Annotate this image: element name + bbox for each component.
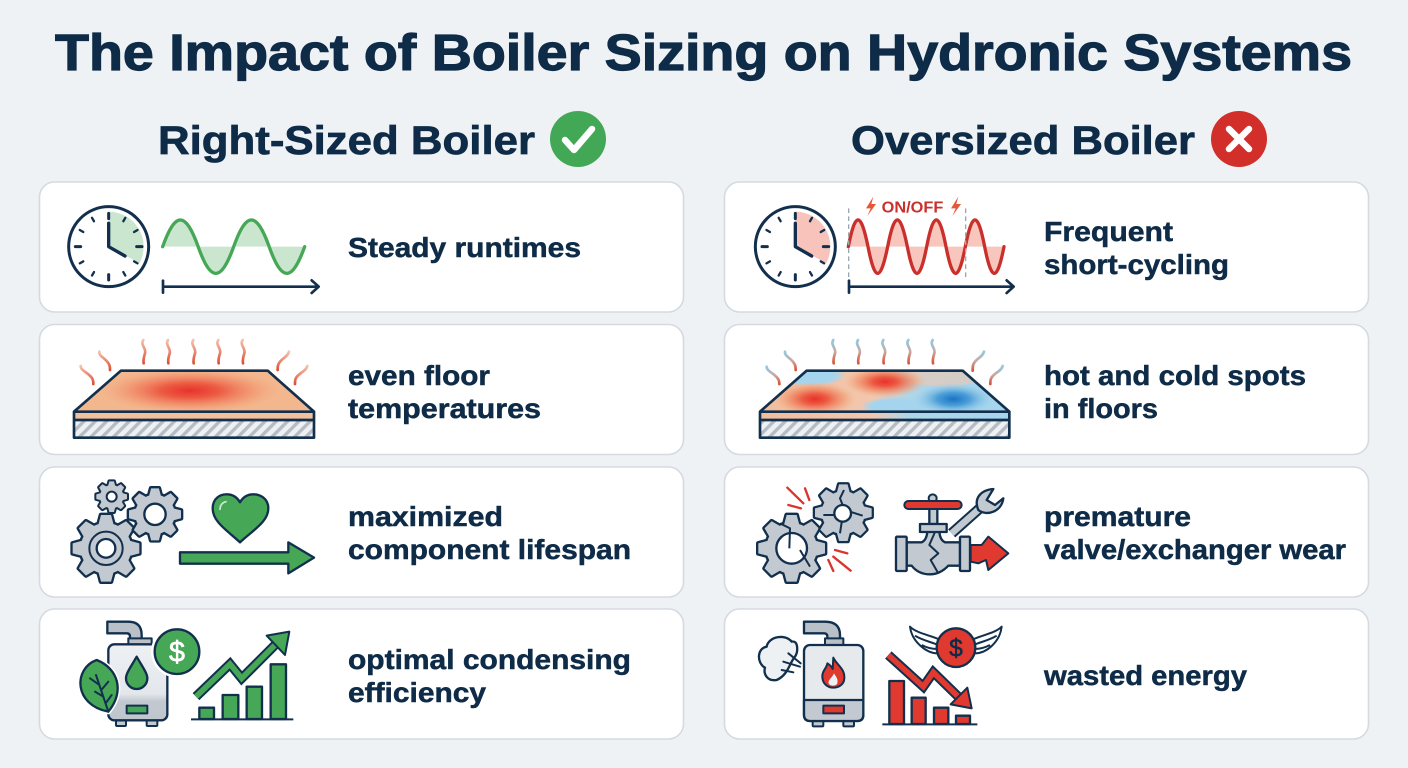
text: premature valve/exchanger wear: premature	[1044, 501, 1191, 532]
text: hot and cold spots in floors	[1044, 360, 1306, 424]
card: hot and cold spots	[724, 324, 1368, 454]
card: maximized component lifespan	[40, 467, 684, 597]
chart: steady sine wave with time axis	[163, 220, 319, 293]
icon: healthy gears	[73, 481, 181, 582]
chart: rapid on/off wave with time axis: ON/OFF	[882, 199, 943, 216]
text: frequent short-cycling	[1044, 216, 1229, 280]
card: premature valve/exchanger wear	[724, 467, 1368, 597]
icon: heart and long-life arrow	[180, 494, 314, 573]
text: premature valve/exchanger wear	[1044, 501, 1346, 565]
icon: coin with wings: $	[949, 635, 963, 662]
chart: rapid on/off wave with time axis	[848, 197, 1014, 293]
text: maximized component lifespan	[348, 501, 631, 565]
icon: evenly heated floor slab	[74, 340, 314, 438]
icon: coin with wings	[910, 627, 1002, 667]
card: even floor temperatures	[40, 324, 684, 454]
icon: cracked gears	[758, 484, 872, 582]
text: steady runtimes: Steady runtimes	[348, 232, 581, 263]
icon: boiler with flame and exhaust cloud	[759, 622, 863, 726]
text: frequent short-cycling: Frequent	[1044, 216, 1173, 247]
icon: clock with red wedge	[755, 207, 835, 287]
chart: falling bars and arrow	[882, 655, 977, 724]
card: wasted energy	[724, 609, 1368, 739]
icon: cracked valve with wrench	[896, 489, 1008, 574]
icon: efficient boiler with leaf and coin	[80, 622, 203, 726]
text: wasted energy: wasted energy	[1043, 660, 1247, 691]
text: optimal condensing efficiency: efficiency	[348, 677, 486, 708]
text: even floor temperatures: even floor	[348, 360, 490, 391]
heading: right-sized boiler: Right-Sized Boiler	[158, 119, 535, 163]
text: even floor temperatures	[348, 360, 541, 424]
text: hot and cold spots in floors: in floors	[1044, 393, 1158, 424]
text: optimal condensing efficiency: optimal condensing	[348, 644, 631, 675]
card: optimal condensing efficiency	[40, 609, 684, 739]
panel: oversized boiler column	[724, 111, 1368, 739]
icon: red cross	[1211, 111, 1267, 167]
heading: oversized boiler: Oversized Boiler	[851, 119, 1195, 163]
icon: efficient boiler with leaf and coin: $	[169, 637, 185, 669]
title: The Impact of Boiler Sizing on Hydronic Systems	[55, 24, 1352, 81]
text: maximized component lifespan: maximized	[348, 501, 503, 532]
panel: right-sized boiler column	[40, 111, 684, 739]
icon: unevenly heated floor slab	[760, 340, 1009, 438]
text: maximized component lifespan: component lifespan	[348, 534, 631, 565]
card: frequent short-cycling	[724, 182, 1368, 312]
text: hot and cold spots in floors: hot and cold spots	[1044, 360, 1306, 391]
icon: green check	[550, 111, 606, 167]
text: even floor temperatures: temperatures	[348, 393, 541, 424]
icon: clock with green wedge	[69, 207, 149, 287]
chart: rising bars and arrow	[191, 632, 293, 719]
text: premature valve/exchanger wear: valve/exchanger wear	[1044, 534, 1346, 565]
text: frequent short-cycling: short-cycling	[1044, 249, 1229, 280]
card: steady runtimes	[40, 182, 684, 312]
text: optimal condensing efficiency	[348, 644, 631, 708]
